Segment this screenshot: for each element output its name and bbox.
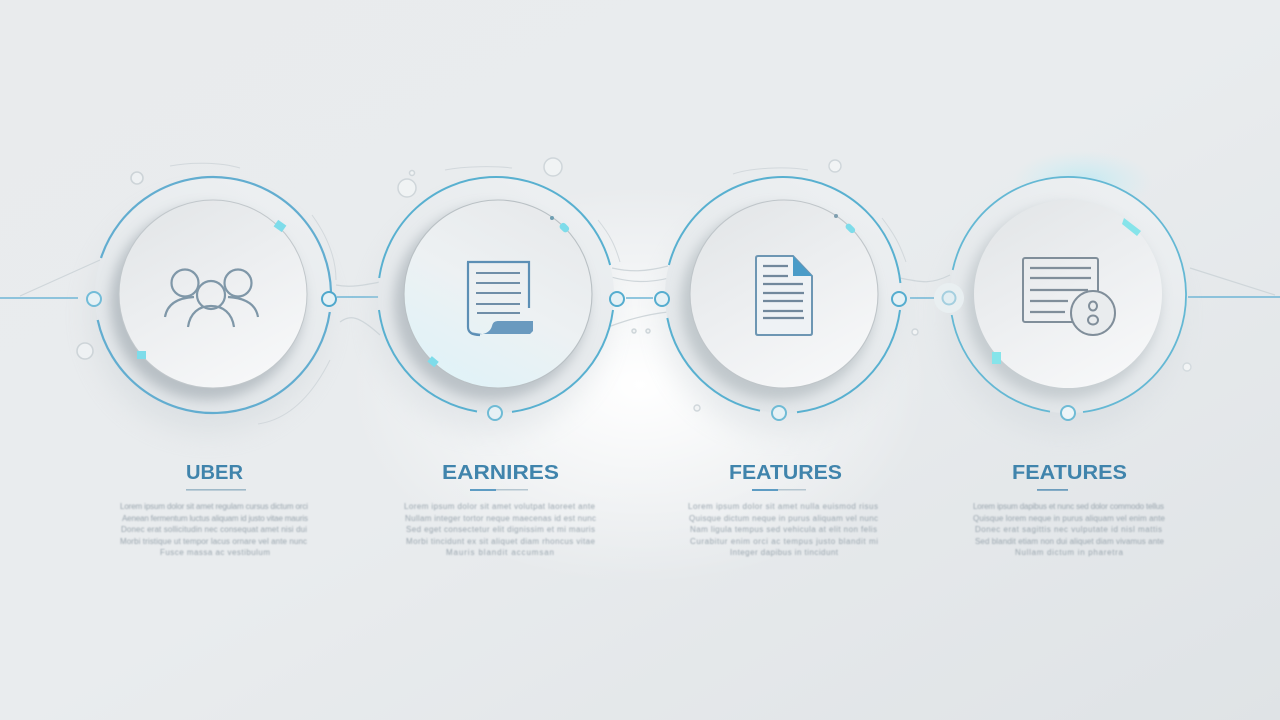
text block: Nullam dictum in pharetra [1015,548,1124,557]
connector lines [0,260,1280,335]
underline [1037,489,1068,491]
cyan accents [992,218,1141,364]
text block: Lorem ipsum dapibus et nunc sed dolor commodo tellus [973,502,1164,511]
cyan accents [137,220,286,359]
text block: Mauris blandit accumsan [446,548,554,557]
node: bottom [1061,406,1075,420]
text block: Nam ligula tempus sed vehicula at elit non felis [690,525,877,534]
text block: Integer dapibus in tincidunt [730,548,839,557]
text block: Curabitur enim orci ac tempus justo blandit mi [690,537,878,546]
heading: EARNIRES [442,462,559,484]
text block: Sed blandit etiam non dui aliquet diam vivamus ante [975,537,1165,546]
icon: document [756,256,812,335]
node: left [87,292,101,306]
text block: Donec erat sollicitudin nec consequat amet nisi dui [121,525,307,534]
ring and shadow [375,167,620,432]
text block: Morbi tristique ut tempor lacus ornare vel ante nunc [120,537,307,546]
text block: Aenean fermentum luctus aliquam id justo vitae mauris [122,514,308,523]
text block: Fusce massa ac vestibulum [160,548,270,557]
ring and shadow [947,177,1186,432]
heading: FEATURES [729,462,842,484]
text block: Lorem ipsum dolor sit amet regulam cursus dictum orci [120,502,308,511]
bubbles [694,160,918,411]
ring and shadow [92,163,336,432]
disc [119,200,307,388]
cyan glow behind last circle [1012,150,1152,214]
cyan accents [834,214,856,234]
node: right [892,292,906,306]
disc [404,200,592,388]
underline [470,489,528,491]
heading: UBER [186,462,244,484]
ring and shadow [663,168,906,432]
underline [752,489,806,491]
bubbles [77,172,143,359]
heading: FEATURES [1012,462,1127,484]
text block: Lorem ipsum dolor sit amet volutpat laoreet ante [404,502,596,511]
underline [186,489,246,491]
text block [404,502,596,557]
icon: scroll [467,262,533,335]
panel: step 2 earnires [375,158,650,557]
text block: Nullam integer tortor neque maecenas id est nunc [405,514,596,523]
node: bottom [772,406,786,420]
node: left [655,292,669,306]
node: right [322,292,336,306]
text block: Donec erat sagittis nec vulputate id nisl mattis [975,525,1162,534]
text block: Sed eget consectetur elit dignissim et mi mauris [406,525,595,534]
cyan accents [427,216,570,367]
text block: Quisque dictum neque in purus aliquam vel nunc [689,514,878,523]
disc [690,200,878,388]
text block [120,502,308,557]
text block [973,502,1166,557]
bubbles [398,158,650,333]
centre glow [350,185,930,585]
text block: Quisque lorem neque in purus aliquam vel enim ante [973,514,1166,523]
node: bottom [488,406,502,420]
panel: step 3 features [655,160,918,557]
disc [974,200,1162,388]
node: left [934,283,964,313]
bubble [1183,363,1191,371]
icon: users [165,270,258,327]
text block: Morbi tincidunt ex sit aliquet diam rhoncus vitae [406,537,596,546]
panel: step 4 features [934,177,1191,557]
icon: list with badge [1023,258,1115,335]
panel: step 1 user [77,163,336,557]
node: left [610,292,624,306]
text block [688,502,878,557]
text block: Lorem ipsum dolor sit amet nulla euismod risus [688,502,878,511]
